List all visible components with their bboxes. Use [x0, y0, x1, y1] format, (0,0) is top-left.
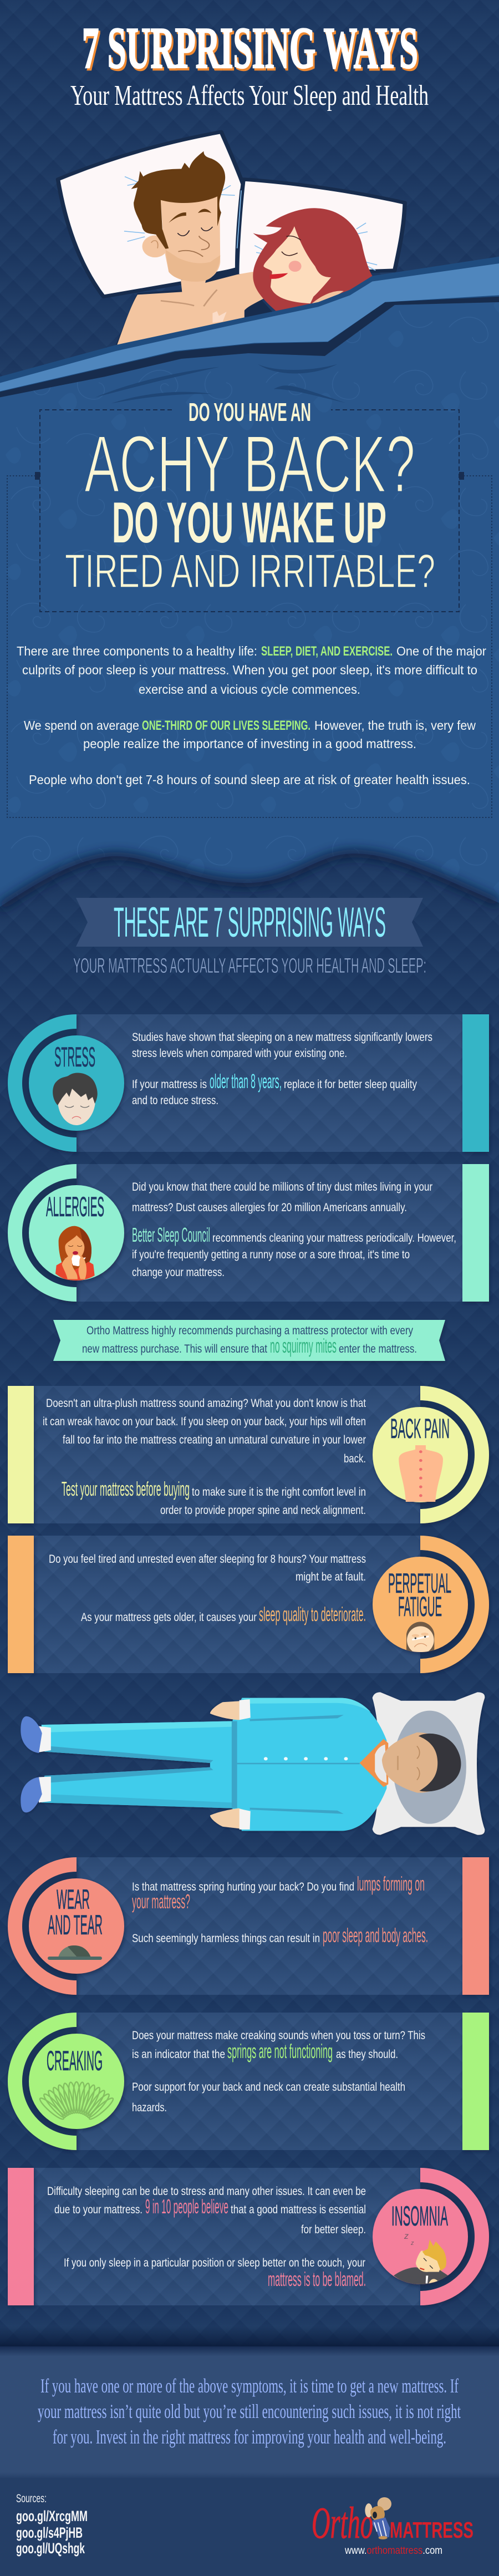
text: one-third of our lives: We spend on average [24, 718, 139, 733]
illustration: sleeping couple on pillows [58, 132, 405, 348]
sources [16, 2492, 88, 2557]
logo: ortho mattress [312, 2497, 473, 2557]
panel: insomnia [8, 2168, 489, 2305]
text: allergies: Did you know that there could be millions of tiny dust mites living in your [132, 1181, 432, 1193]
text: allergies: if you're frequently getting a runny nose or a sore throat, it's time to [132, 1248, 410, 1261]
text: allergies [132, 1181, 456, 1279]
pillow: left [58, 132, 243, 297]
panel: creaking [8, 2013, 489, 2150]
text: stress: and to reduce stress. [132, 1094, 218, 1107]
frame: dashed box around question [40, 410, 459, 612]
text: insomnia: that a good mattress is essential [231, 2203, 366, 2216]
text: three components intro: SLEEP, DIET, AND EXERCISE. [261, 644, 393, 659]
text: one-third of our lives: ONE-THIRD OF OUR LIVES SLEEPING. [142, 718, 310, 733]
panel: wear and tear: AND TEAR [48, 1909, 103, 1940]
text: insomnia: Difficulty sleeping can be due to stress and many other issues. It can even be [47, 2185, 366, 2198]
panel: stress: STRESS [54, 1041, 95, 1073]
footer background [0, 2478, 499, 2576]
ribbon: mattress protector tip: no squirmy mites [270, 1334, 337, 1357]
text: allergies: Better Sleep Council [132, 1223, 210, 1246]
panel: stress [8, 1014, 489, 1152]
panel: wear and tear [8, 1857, 489, 1995]
text: back pain: Doesn't an ultra-plush mattress sound amazing? What you don't know is that [46, 1397, 366, 1410]
panel: closing call to action [0, 2346, 499, 2479]
pajama top and sleeves [232, 1698, 386, 1831]
panel: creaking: CREAKING [47, 2045, 103, 2076]
pillow under head [373, 1692, 485, 1835]
icon: sleeping man: z [410, 2240, 414, 2247]
text: back pain: back. [344, 1452, 366, 1465]
text: wear and tear: Is that mattress spring hurting your back? Do you find [132, 1881, 354, 1893]
text: creaking: Does your mattress make creaking sounds when you toss or turn? This [132, 2029, 425, 2042]
text: stress: stress levels when compared with your existing one. [132, 1047, 347, 1060]
icon: koala mascot [365, 2497, 391, 2539]
text: one-third of our lives: However, the truth is, very few [314, 718, 476, 733]
ribbon: mattress protector tip [53, 1320, 445, 1361]
text: three components intro: culprits of poor sleep is your mattress. When you get poor sleep, it's more difficult to [22, 663, 477, 677]
label: perpetual fatigue [388, 1568, 451, 1622]
text: stress [132, 1031, 432, 1107]
bed: quilted bedspread with floral pattern [0, 302, 499, 907]
ribbon: mattress protector tip: new mattress purchase. This will ensure that [82, 1343, 267, 1355]
pillow: right [237, 179, 405, 276]
icon: sleeping man [394, 2232, 448, 2285]
text: perpetual fatigue: As your mattress gets older, it causes your [81, 1611, 257, 1624]
text: creaking: hazards. [132, 2101, 167, 2114]
text: one-third of our lives [24, 718, 476, 751]
text: wear and tear: your mattress? [132, 1890, 190, 1913]
buttons [264, 1757, 348, 1760]
text: stress: older than 8 years, [210, 1070, 282, 1093]
pajama legs [42, 1721, 232, 1808]
icon: sleeping man: z [404, 2232, 409, 2241]
man head [131, 151, 225, 282]
text: creaking: is an indicator that the [132, 2048, 225, 2061]
ribbon: mattress protector tip: Ortho Mattress highly recommends purchasing a mattress protector with every [86, 1324, 413, 1337]
frame: dotted box around intro [7, 472, 492, 817]
icon: stressed face [53, 1073, 98, 1125]
wave edge shadow [0, 853, 499, 907]
blanket [0, 257, 499, 403]
text: insomnia: If you only sleep in a particular position or sleep better on the couch, your [64, 2257, 365, 2269]
text: insomnia: for better sleep. [301, 2223, 366, 2236]
sources: goo.gl/s4PjHB [16, 2524, 83, 2541]
text: creaking: Poor support for your back and neck can create substantial health [132, 2081, 405, 2094]
text: back pain: to make sure it is the right comfort level in [192, 1486, 366, 1498]
man torso [115, 268, 274, 348]
pillow creases [124, 176, 377, 271]
collar and head [360, 1732, 461, 1793]
panel: insomnia: mattress is to be blamed. [268, 2268, 366, 2290]
text: creaking [132, 2029, 425, 2114]
panel: perpetual fatigue: sleep quality to deteriorate. [259, 1603, 366, 1625]
label: wear and tear: WEAR [57, 1884, 90, 1915]
text: seven to eight hours: People who don't get 7-8 hours of sound sleep are at risk of greater health issues. [29, 773, 470, 787]
text: back pain: fall too far into the mattress creating an unnatural curvature in your lower [63, 1434, 366, 1446]
logo: ortho mattress: Ortho [312, 2499, 373, 2548]
panel: back pain [8, 1386, 489, 1523]
text: creaking: springs are not functioning [227, 2040, 333, 2062]
text: insomnia [47, 2185, 366, 2290]
text: three components intro: One of the major [396, 644, 486, 658]
text: insomnia: due to your mattress. [54, 2203, 142, 2216]
icon: slinky spring [38, 2082, 115, 2121]
bedspread wrinkles [95, 364, 345, 403]
hands [210, 1699, 251, 1830]
illustration: man lying on his back in pajamas [21, 1692, 485, 1835]
text: back pain: order to provide proper spine and neck alignment. [160, 1504, 366, 1517]
woman [253, 208, 373, 313]
panel: perpetual fatigue [8, 1536, 489, 1673]
ribbon: mattress protector tip: enter the mattress. [339, 1343, 417, 1355]
sources: Sources: [16, 2492, 47, 2505]
text: perpetual fatigue: Do you feel tired and unrested even after sleeping for 8 hours? Your mattress [49, 1553, 366, 1566]
text: three components intro: exercise and a vicious cycle commences. [139, 682, 360, 697]
text: allergies: change your mattress. [132, 1266, 225, 1279]
text: website: www.orthomattress.com [344, 2545, 442, 2557]
text: creaking: as they should. [336, 2048, 398, 2061]
text: perpetual fatigue: might be at fault. [296, 1571, 366, 1583]
text: back pain [43, 1397, 366, 1517]
sources: goo.gl/XrcgMM [16, 2508, 88, 2524]
section shadow above closing panel [0, 2326, 499, 2346]
text: insomnia: 9 in 10 people believe [145, 2195, 228, 2218]
text: stress: If your mattress is [132, 1078, 207, 1091]
text: closing message [38, 2375, 461, 2448]
icon: tired face [406, 1622, 434, 1654]
sources: goo.gl/UQshgk [16, 2540, 85, 2557]
text: back pain: it can wreak havoc on your back. If you sleep on your back, your hips will often [43, 1415, 366, 1428]
feet [21, 1716, 51, 1812]
panel: allergies [8, 1164, 489, 1302]
panel: allergies: ALLERGIES [46, 1191, 104, 1222]
text: three components intro [17, 644, 486, 697]
label: wear and tear [48, 1884, 103, 1940]
icon: back with spine points [399, 1445, 443, 1502]
text: allergies: mattress? Dust causes allergies for 20 million Americans annually. [132, 1201, 407, 1214]
text: wear and tear: Such seemingly harmless things can result in [132, 1932, 320, 1945]
text: one-third of our lives: people realize the importance of investing in a good mattress. [83, 736, 416, 751]
text: stress: Studies have shown that sleeping on a new mattress significantly lowers [132, 1031, 432, 1044]
icon: sneezing woman [55, 1226, 95, 1281]
belt [232, 1721, 237, 1808]
text: back pain: Test your mattress before buying [62, 1477, 190, 1500]
heading: do you have an: DO YOU HAVE AN [189, 398, 311, 426]
text: three components intro: There are three components to a healthy life: [17, 644, 257, 658]
text: wear and tear [132, 1872, 428, 1947]
icon: mattress lump [48, 1945, 102, 1960]
text: stress: replace it for better sleep quality [284, 1078, 417, 1091]
text: perpetual fatigue [49, 1553, 366, 1625]
